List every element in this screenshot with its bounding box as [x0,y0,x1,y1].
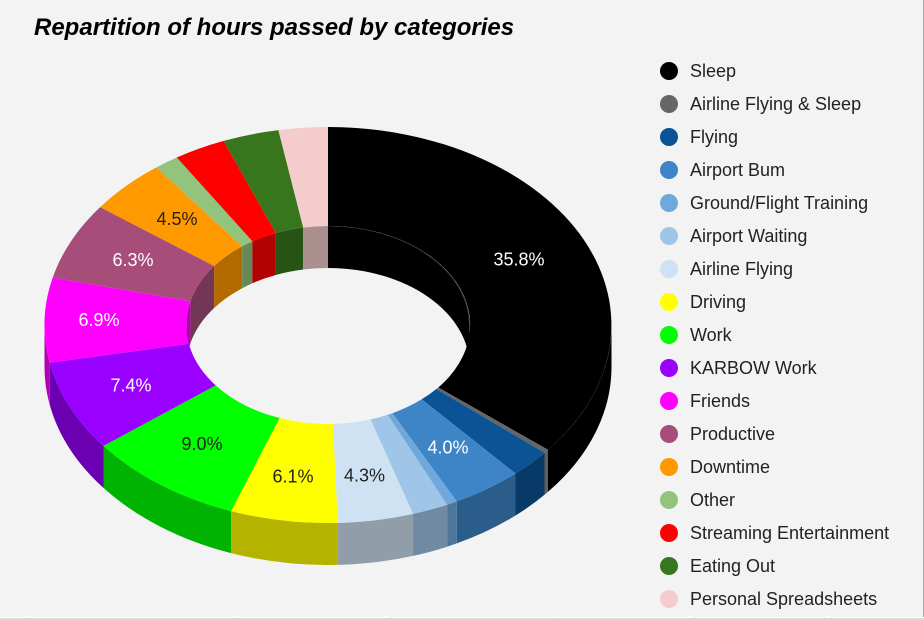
percentage labels: 6.9% [78,310,120,330]
percentage labels: 4.0% [427,438,469,458]
legend item: Other [660,490,735,510]
slice: Streaming Entertainment [177,141,276,241]
legend item: Downtime: Downtime [690,457,770,477]
slice: Airport Bum [392,399,516,501]
legend item: Flying: Flying [690,127,738,147]
percentage labels: 7.4% [110,376,152,396]
slice: Flying [422,389,544,474]
slice: Productive [53,207,214,301]
legend item: Productive: Productive [690,424,775,444]
legend item: Personal Spreadsheets: Personal Spreadsheets [690,589,877,609]
legend item: Airport Bum: Airport Bum [690,160,785,180]
legend item: Airline Flying & Sleep: Airline Flying & Sleep [690,94,861,114]
percentage labels: 35.8% [493,250,545,270]
slice: Sleep [328,127,611,450]
inner walls of the hole [186,226,470,367]
legend item: Flying [660,127,738,147]
legend item: Other: Other [690,490,735,510]
percentage labels: 6.1% [272,466,314,486]
outer walls [44,325,612,565]
legend item: Work [660,325,733,345]
slice: Personal Spreadsheets [278,127,328,228]
legend item: Work: Work [690,325,733,345]
legend item: Driving: Driving [690,292,746,312]
title: Repartition of hours passed by categories [34,14,514,41]
legend item: Eating Out: Eating Out [690,556,775,576]
slice: Airline Flying & Sleep [436,388,548,453]
legend item: Streaming Entertainment: Streaming Entertainment [690,523,889,543]
legend item: Friends [660,391,750,411]
slice: Ground/Flight Training [388,413,457,505]
legend [660,61,889,609]
slice: Driving [231,418,338,523]
legend item: Sleep: Sleep [690,61,736,81]
slice: Eating Out [224,130,303,233]
percentage labels: 4.5% [156,209,198,229]
legend item: KARBOW Work: KARBOW Work [690,358,818,378]
donut chart [44,127,611,565]
legend item: Sleep [660,61,736,81]
top face slices [44,127,611,523]
slice: Airline Flying [333,419,413,523]
slice: Other [156,158,252,246]
slice: Work [104,385,280,511]
slice: Downtime [100,167,242,266]
slice: Friends [44,278,190,363]
legend item: Airport Waiting: Airport Waiting [690,226,807,246]
legend item: Airline Flying: Airline Flying [690,259,793,279]
legend item: Driving [660,292,746,312]
legend item: Friends: Friends [690,391,750,411]
percentage labels: 9.0% [181,434,223,454]
legend item: Ground/Flight Training: Ground/Flight Training [690,193,868,213]
percentage labels: 4.3% [344,466,385,486]
slice: KARBOW Work [50,344,216,446]
percentage labels [78,209,545,486]
percentage labels: 6.3% [112,250,154,270]
slice: Airport Waiting [370,415,447,514]
